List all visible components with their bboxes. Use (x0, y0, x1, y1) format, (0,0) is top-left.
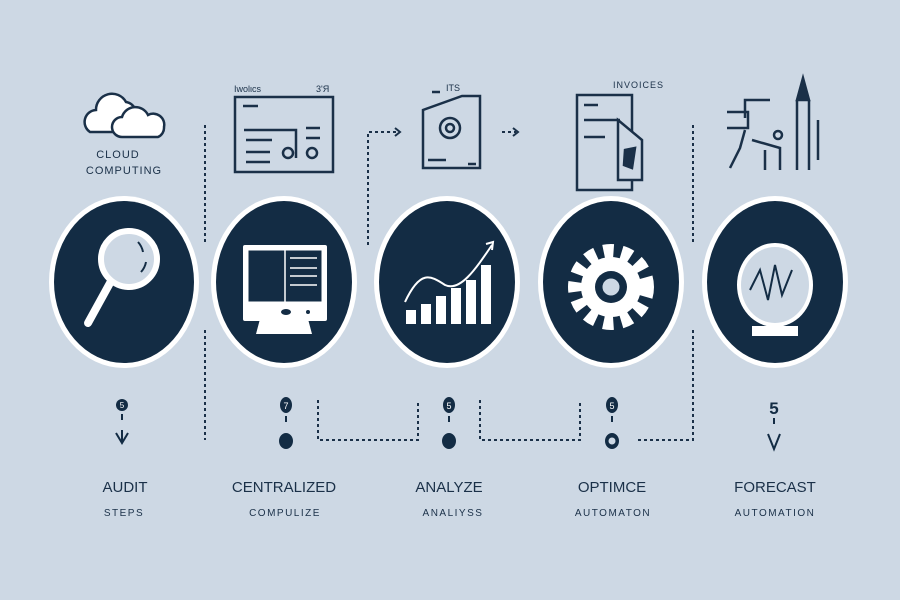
icon: invoices window (234, 84, 333, 172)
icon: invoices document (577, 80, 664, 190)
markers row: 7 (283, 401, 289, 411)
icon: invoices window: Iwolιcs (234, 84, 262, 94)
markers row: 5 (120, 401, 125, 410)
labels: FORECAST (734, 479, 816, 496)
markers row: 5 (769, 399, 779, 418)
step 5 circle: forecast (702, 196, 848, 368)
labels: ANALIYSS (423, 508, 483, 519)
labels: AUDIT (102, 479, 148, 496)
markers row (116, 397, 780, 449)
labels: AUTOMATON (575, 508, 651, 519)
markers row: 5 (446, 401, 452, 411)
step 4 circle: optimize (538, 196, 684, 368)
markers row: 5 (609, 401, 615, 411)
labels: CENTRALIZED (232, 479, 336, 496)
step 2 circle: centralized (211, 196, 357, 368)
arrow: dotted to step 4 (395, 128, 518, 136)
icon: cloud computing: CLOUD (96, 149, 140, 161)
labels: AUTOMATION (735, 508, 815, 519)
step 1 circle: audit (49, 196, 199, 368)
step 3 circle: analyze (374, 196, 520, 368)
icon: forecast chart (727, 78, 818, 170)
labels (102, 479, 816, 519)
labels: ANALYZE (415, 479, 483, 496)
labels: COMPULIZE (249, 508, 321, 519)
icon: invoices window: 3'Я (316, 84, 329, 94)
icon: document with gear: ITS (446, 83, 460, 93)
icon: cloud computing: COMPUTING (86, 165, 162, 177)
icon: cloud computing (85, 94, 164, 177)
icon: document with gear (423, 83, 480, 168)
icon: invoices document: INVOICES (613, 80, 664, 90)
labels: OPTIMCE (578, 479, 646, 496)
labels: STEPS (104, 508, 144, 519)
